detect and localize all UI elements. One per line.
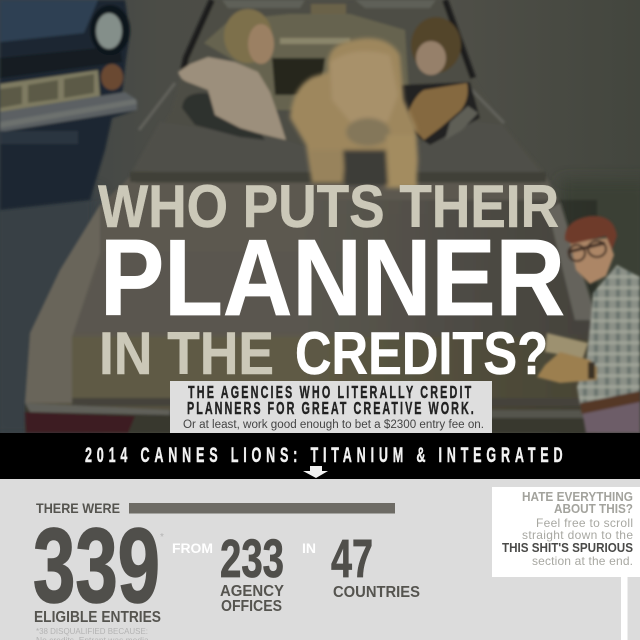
banner text: 2014 CANNES LIONS: TITANIUM & INTEGRATED — [85, 443, 563, 467]
footnote: *38 DISQUALIFIED BECAUSE: — [36, 626, 148, 636]
in label: IN — [302, 541, 316, 556]
icon: down arrow — [303, 466, 328, 478]
stats panel — [0, 479, 640, 640]
there were label: THERE WERE — [36, 500, 120, 516]
title line: who puts their: WHO PUTS THEIR — [98, 173, 559, 240]
callout body 1: Feel free to scroll — [536, 516, 633, 530]
subtitle line 2: PLANNERS FOR GREAT CREATIVE WORK. — [187, 399, 474, 419]
right man — [408, 83, 468, 140]
number 233: 233 — [220, 529, 284, 589]
vertical connector line — [621, 577, 628, 640]
callout heading 1: HATE EVERYTHING — [522, 490, 633, 504]
title line: in the: IN THE — [99, 320, 274, 387]
callout body 2: straight down to the — [522, 528, 633, 542]
car body — [25, 175, 597, 433]
agency label: AGENCY — [220, 583, 285, 600]
number 47: 47 — [331, 529, 373, 589]
black banner — [0, 433, 640, 479]
countries label: COUNTRIES — [333, 584, 420, 601]
trim and bumper — [72, 398, 592, 406]
offices label: OFFICES — [221, 598, 282, 615]
left truck — [0, 0, 137, 210]
asterisk: * — [160, 532, 164, 543]
title — [98, 173, 565, 387]
rear seats — [182, 93, 265, 140]
subtitle note: Or at least, work good enough to bet a $2300 entry fee on. — [183, 419, 484, 431]
callout: hate everything — [492, 487, 640, 577]
subtitle box — [170, 381, 492, 433]
title line: planner: PLANNER — [100, 217, 565, 339]
photo: lion in convertible — [0, 0, 640, 440]
left man — [178, 57, 286, 140]
chrome frames — [139, 83, 504, 130]
number 339: 339 — [33, 507, 160, 625]
lion — [290, 38, 418, 188]
from label: FROM — [172, 541, 213, 556]
title line: credits: CREDITS? — [295, 320, 548, 387]
windscreen and dash — [204, 14, 410, 110]
tonneau cover — [130, 0, 546, 183]
subtitle line 1: THE AGENCIES WHO LITERALLY CREDIT — [188, 383, 471, 403]
nerd cut-out — [537, 216, 640, 433]
callout emphasis: THIS SHIT'S SPURIOUS — [502, 541, 633, 555]
bar — [129, 503, 395, 514]
callout body 3: section at the end. — [532, 554, 633, 568]
eligible entries label: ELIGIBLE ENTRIES — [34, 609, 161, 626]
callout heading 2: ABOUT THIS? — [554, 502, 633, 516]
